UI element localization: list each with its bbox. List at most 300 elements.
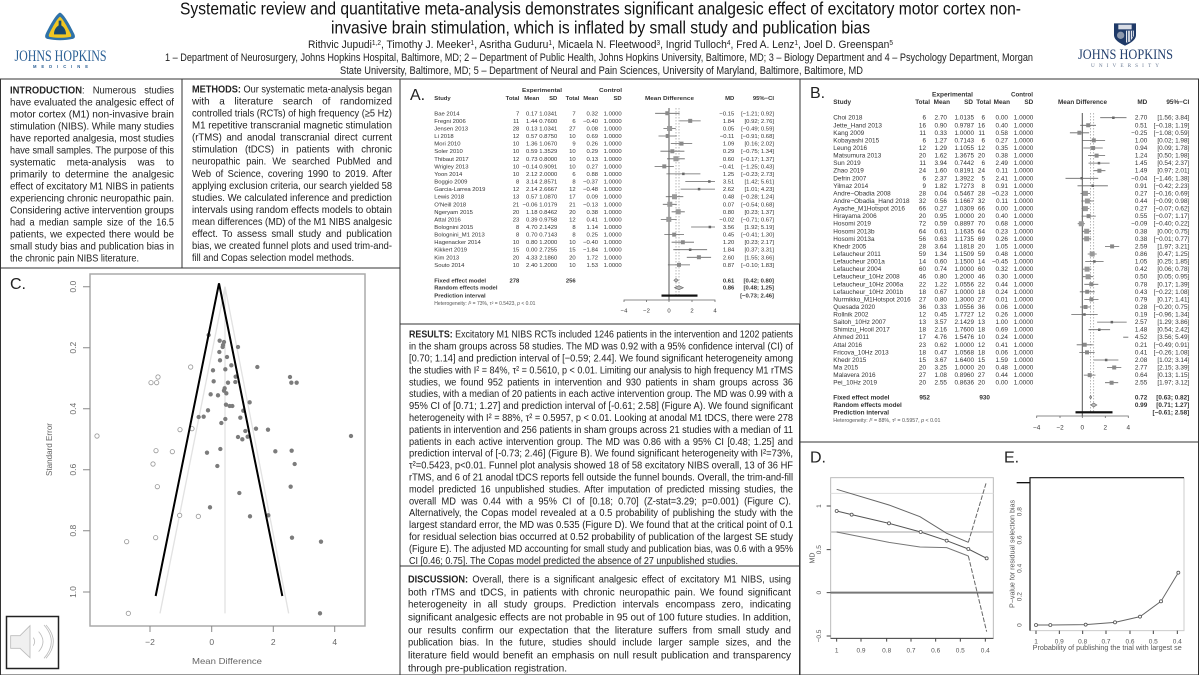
- table B values: [−0.16; 0.69]: [1154, 190, 1190, 197]
- table B summary rows: Fixed effect model: [833, 394, 890, 401]
- table A values: 0.32: [587, 111, 598, 117]
- panel: introduction: INTRODUCTION: Numerous studies: [10, 86, 174, 96]
- table B values: 59: [978, 251, 985, 258]
- table B values: 1.0000: [1014, 213, 1034, 220]
- table A values: 4.70: [526, 225, 538, 231]
- table A values: 0.05: [723, 126, 735, 132]
- table B values: 1.59: [996, 357, 1008, 364]
- table B values: 0.91: [1135, 183, 1148, 190]
- panel: introduction: have reported analgesia, most studies: [10, 134, 174, 144]
- funnel plot frame and axes: 1.0: [68, 586, 78, 598]
- table A values: 2.8571: [539, 180, 557, 186]
- table B values: [1.56; 3.84]: [1157, 115, 1190, 122]
- table A values: 12: [513, 134, 519, 140]
- table B values: [−0.07; 1.17]: [1154, 213, 1190, 220]
- table A study names: Bae 2014: [434, 111, 460, 117]
- table B study names: Saitoh_10Hz 2007: [833, 319, 886, 326]
- table A values: [−1.21; 0.92]: [741, 111, 774, 117]
- table B values: 18: [978, 327, 985, 334]
- table B values: 12: [919, 145, 926, 152]
- table B values: 1.0000: [954, 130, 974, 137]
- table B values: 0.41: [996, 342, 1008, 349]
- table B values: 1.0000: [1014, 236, 1034, 243]
- table A values: 2.0000: [539, 172, 558, 178]
- table A values: 0.59: [526, 149, 538, 155]
- table B header: Experimental: [932, 92, 973, 99]
- funnel plot frame and axes: −2: [145, 637, 155, 647]
- table A values: 10: [513, 263, 520, 269]
- table A study names: O'Neill 2018: [434, 202, 467, 208]
- table A values: 1.0000: [604, 210, 622, 216]
- table A values: [0.23; 2.17]: [745, 240, 774, 246]
- table B header: SD: [1024, 99, 1034, 106]
- table B values: 69: [978, 236, 985, 243]
- table A header: 95%−CI: [753, 96, 774, 102]
- table B header: [833, 92, 1190, 106]
- table B header: Mean: [934, 99, 950, 106]
- table A values: 12: [569, 217, 576, 223]
- panel: results: 95% CI of [0.71; 1.27] and prediction interval of [-0.61; 2.58] (Figure A). We found significant: [409, 401, 793, 412]
- table A values: 2.40: [526, 263, 538, 269]
- table B values: 1.0000: [1014, 221, 1034, 228]
- forest plot A axis labels: −4: [621, 309, 628, 315]
- table A values: 20: [569, 255, 576, 261]
- table B values: 1.1735: [954, 236, 974, 243]
- table A values: 13: [513, 195, 520, 201]
- table A values: [1.01; 4.23]: [745, 187, 774, 193]
- table B values: 20: [978, 380, 985, 387]
- panel: methods: effect. To assess small study and publication: [192, 229, 392, 240]
- table A values: 2.60: [723, 255, 735, 261]
- table A values: 10: [513, 240, 520, 246]
- title: invasive brain stimulation, which is inflated by small study and publication bias: [331, 18, 870, 38]
- table B values: [0.02; 1.98]: [1157, 137, 1190, 144]
- table B values: 0.00: [996, 380, 1008, 387]
- table B values: 15: [919, 357, 926, 364]
- table B values: 1.7600: [954, 327, 974, 334]
- table B values: 36: [919, 304, 926, 311]
- table A header: Mean Difference: [645, 96, 695, 102]
- table B values: 1.0000: [1014, 168, 1034, 175]
- table A values: [−0.75; 1.34]: [741, 149, 774, 155]
- table A values: [1.92; 5.19]: [745, 225, 774, 231]
- table A values: [−0.23; 2.73]: [741, 172, 774, 178]
- table B values: 18: [919, 327, 926, 334]
- logo: Johns Hopkins Medicine: [14, 13, 106, 69]
- table A values: 10: [513, 172, 520, 178]
- table A values: 0.73: [526, 157, 538, 163]
- table B study names: Malavera 2016: [833, 372, 876, 379]
- table B values: 1.0000: [954, 213, 974, 220]
- table B values: 6: [922, 137, 926, 144]
- authors: 1,2: [372, 40, 381, 47]
- table B values: 1.0000: [1014, 342, 1034, 349]
- panel: methods: intervals using random effects models to obtain: [192, 205, 392, 216]
- table B study names: Attal 2016: [833, 342, 863, 349]
- table B values: 1.0000: [1014, 274, 1034, 281]
- table B values: 0.06: [996, 304, 1008, 311]
- table B values: 0.00: [996, 115, 1008, 122]
- panel: methods: stimulation (tDCS) in patients with chronic: [192, 145, 392, 156]
- panel: results: [0.70; 1.14] and prediction interval of [−0.59; 2.44]. We found significant heterogeneity among: [409, 354, 793, 364]
- table B study names: Choi 2018: [833, 115, 863, 122]
- table B values: 11: [978, 130, 985, 137]
- table A values: 1.53: [587, 263, 599, 269]
- table A values: −0.13: [583, 202, 599, 208]
- table B values: 0.91: [996, 183, 1008, 190]
- table A values: 1.0000: [604, 180, 622, 186]
- table A values: 0.13: [526, 126, 538, 132]
- table B values: 2.37: [935, 175, 947, 182]
- table B values: 0.59: [935, 221, 947, 228]
- panel: funnel plot C: [0, 268, 400, 675]
- table B values: 4.52: [1135, 334, 1148, 341]
- table B values: 20: [919, 364, 926, 372]
- table B values: 0.8636: [954, 380, 974, 387]
- forest plot B axis labels: 2: [1104, 424, 1108, 432]
- table B values: [0.97; 2.01]: [1157, 168, 1190, 175]
- table B values: 8: [981, 183, 985, 190]
- table B values: 0.8191: [954, 168, 974, 175]
- table B values: [−1.08; 0.59]: [1154, 130, 1190, 137]
- funnel plot frame and axes: [44, 274, 365, 666]
- table B values: 0.5467: [954, 190, 974, 197]
- table A values: [0.92; 2.76]: [745, 119, 774, 125]
- table A values: [−0.17; 1.37]: [741, 157, 774, 163]
- panel: results: heterogeneity with I² = 88%, τ² = 0.5957, p < 0.01. Looking at anodal M1 tDCS, there were 278: [409, 413, 793, 424]
- table A summary rows: Prediction interval: [434, 294, 486, 300]
- table B values: 18: [978, 349, 985, 356]
- funnel plot frame and axes: 0.8: [68, 525, 78, 537]
- table A values: 2.1860: [539, 255, 558, 261]
- table A values: 10: [569, 134, 576, 140]
- table A values: 0.8462: [539, 210, 557, 216]
- table B values: 1.0000: [1014, 130, 1034, 137]
- affiliations: 1 – Department of Neurosurgery, Johns Hopkins Hospital, Baltimore, MD; 2 – Department of Public Health, Johns Hopkins University, Baltimore, MD; 3 – Biology Department and 4 – Psychology Department, Morgan: [165, 52, 1033, 64]
- table A values: 1.0000: [604, 172, 622, 178]
- table A values: 1.20: [723, 240, 735, 246]
- table A values: 0.69: [587, 134, 598, 140]
- table B study names: Hosomi 2013b: [833, 228, 875, 235]
- table B values: −0.25: [1131, 130, 1148, 137]
- table B values: 0.78: [1135, 281, 1148, 288]
- table A values: 0.29: [723, 149, 734, 155]
- table B values: [2.15; 3.39]: [1157, 364, 1190, 372]
- table B values: [−0.01; 0.77]: [1154, 236, 1190, 243]
- table A values: 12: [513, 187, 519, 193]
- table A values: 1.0870: [539, 195, 558, 201]
- chart D: MD vs publication probability: [810, 478, 993, 654]
- table B study names: Lefaucheur_10Hz 2006a: [833, 281, 904, 288]
- table B study names: Fricova_10Hz 2013: [833, 349, 889, 356]
- table A values: −1.84: [583, 248, 599, 254]
- chart E: p-value for residual selection bias: 0.2: [1016, 592, 1024, 601]
- table A study names: Lewis 2018: [434, 195, 465, 201]
- panel: discussion: both rTMS and tDCS, in patients with chronic neuropathic pain. We found significant: [408, 588, 791, 598]
- table B study names: Ma 2015: [833, 364, 859, 372]
- table B values: 0.38: [1135, 228, 1148, 235]
- table A values: 10: [569, 164, 576, 170]
- table B study names: Khedr 2005: [833, 243, 867, 250]
- table A values: 2.62: [723, 187, 734, 193]
- table B values: 0.38: [996, 153, 1008, 160]
- table B values: 0.95: [935, 213, 947, 220]
- table B values: 18: [919, 289, 926, 296]
- table A values: 0.41: [587, 217, 598, 223]
- table B values: 1.3675: [954, 153, 974, 160]
- panel: results: model predicted 16 unpublished studies. After imputation of predicted missing studies, the: [409, 484, 793, 495]
- forest plot A axis labels: −2: [643, 309, 650, 315]
- table B values: 17: [919, 334, 926, 341]
- table A values: 7: [516, 111, 519, 117]
- table B values: 20: [919, 213, 926, 220]
- title: [180, 0, 1021, 38]
- funnel plot frame and axes: 4: [332, 637, 337, 647]
- table A values: 0.27: [587, 164, 598, 170]
- table B values: 0.11: [996, 168, 1008, 175]
- table B values: 22: [978, 281, 985, 288]
- table B study names: Lefaucheur_10Hz 2008: [833, 274, 900, 281]
- table B values: 0.33: [935, 130, 947, 137]
- chart E: p-value for residual selection bias: Probability of publishing the trial with largest se: [1033, 645, 1182, 652]
- table B header: 95%−CI: [1166, 99, 1190, 106]
- panel: results: studies, with a median of 20 patients in each active intervention group. The MD was 0.99 with a: [409, 389, 793, 400]
- forest plot A axis labels: 0: [667, 309, 671, 315]
- table B summary rows: Random effects model: [833, 402, 902, 409]
- table B values: 32: [978, 198, 985, 205]
- table A values: [−0.28; 1.24]: [741, 195, 774, 201]
- table B values: 1.0000: [1014, 206, 1034, 213]
- table A values: [−1.25; 0.43]: [741, 164, 774, 170]
- table B study names: Andre−Obadia_Hand 2018: [833, 198, 910, 205]
- table A header: Total: [566, 96, 580, 102]
- funnel plot frame and axes: 0.6: [68, 464, 78, 476]
- table B values: 24: [978, 168, 985, 175]
- table A values: 1.0179: [539, 202, 557, 208]
- table B values: 1.82: [935, 183, 947, 190]
- table B values: [0.50; 1.98]: [1157, 153, 1190, 160]
- table B values: 11: [919, 160, 926, 167]
- table B values: 1.1509: [954, 251, 974, 258]
- forest plot A axis labels: 2: [690, 309, 694, 315]
- forest plot B graphic: [1037, 113, 1128, 418]
- chart D: MD vs publication probability: 0.6: [931, 647, 941, 654]
- table B values: 0.60: [935, 258, 947, 266]
- table B values: 18: [978, 289, 985, 296]
- table B values: 0.11: [996, 198, 1008, 205]
- table B values: 60: [978, 266, 985, 273]
- panel label B: B.: [810, 85, 825, 102]
- panel: discussion: [400, 566, 800, 675]
- authors: 4: [727, 40, 731, 47]
- chart E: p-value for residual selection bias: 0.8: [1078, 638, 1088, 645]
- table B values: [−0.26; 1.08]: [1154, 349, 1190, 356]
- table B study names: Lefaucheur 2001a: [833, 258, 885, 266]
- table B values: 1.0000: [1014, 364, 1034, 372]
- chart D: MD vs publication probability: 0.5: [816, 545, 823, 554]
- table B values: 1.0309: [954, 206, 974, 213]
- table A values: 0.39: [526, 217, 538, 223]
- table B values: 9: [922, 183, 926, 190]
- panel: methods: neuropathic pain. We searched PubMed and: [192, 157, 392, 168]
- forest plot B axis labels: −2: [1056, 424, 1064, 432]
- table B values: 2.59: [1135, 243, 1148, 250]
- panel: discussion: literature field would benefit an emphasis on null result publication and transparency: [408, 650, 792, 662]
- authors: , Asritha Guduru: [474, 39, 548, 51]
- chart D: MD vs publication probability: 0.4: [981, 647, 990, 654]
- panel label D: D.: [810, 450, 826, 466]
- table B study names: Hirayama 2006: [833, 213, 877, 220]
- table A values: 1.0000: [604, 119, 622, 125]
- funnel plot frame and axes: 0: [209, 637, 214, 647]
- table B values: 2.55: [1135, 380, 1148, 387]
- table B values: 0.41: [1135, 349, 1148, 356]
- table A values: 8: [572, 180, 576, 186]
- table B values: 13: [978, 319, 985, 326]
- table A summary rows: 0.61: [723, 278, 735, 284]
- table B values: 1.0000: [1014, 319, 1034, 326]
- table B values: [0.00; 0.75]: [1157, 228, 1190, 235]
- table A values: −0.48: [583, 187, 599, 193]
- panel: results: CI [0.46; 0.75]. The Copas model predicted the absence of 27 unpublished studies.: [409, 556, 738, 567]
- table B values: 0.67: [935, 289, 947, 296]
- table A values: 1.0000: [604, 225, 622, 231]
- table A study names: Kikkert 2019: [434, 248, 467, 254]
- table A header: Total: [506, 96, 520, 102]
- panel: methods: METHODS: Our systematic meta-analysis began: [192, 84, 392, 96]
- table A study names: Attal 2016: [434, 217, 462, 223]
- table B study names: Leung 2016: [833, 145, 868, 152]
- table A header: SD: [614, 96, 622, 102]
- panel: results: rTMS, and 6 of 21 anodal tDCS reports fell outside the funnel bounds. Overall, the trim-and-fill: [409, 472, 793, 484]
- table B values: [0.17; 1.39]: [1157, 281, 1190, 288]
- table A values: 7: [572, 111, 576, 117]
- table B values: 0.68: [996, 221, 1008, 228]
- table B summary rows: [−0.61; 2.58]: [1153, 409, 1189, 416]
- table A header: Control: [599, 88, 622, 94]
- table A header: Mean: [583, 96, 599, 102]
- table B values: 13: [919, 319, 926, 326]
- table B summary rows: 0.72: [1135, 394, 1148, 401]
- table B values: 27: [978, 296, 985, 303]
- table B study names: Jette_Hand 2013: [833, 122, 882, 129]
- table B values: 1.1500: [954, 258, 974, 266]
- table B study names: Kang 2009: [833, 130, 865, 137]
- table B values: 66: [919, 206, 926, 213]
- table B values: 18: [919, 349, 926, 356]
- table B values: [−1.46; 1.38]: [1154, 175, 1190, 182]
- panel: discussion: DISCUSSION: Overall, there is a significant analgesic effect of excitatory M1 NIBS, using: [408, 574, 791, 586]
- table A values: 1.0000: [604, 157, 622, 163]
- table B values: 2.70: [935, 115, 947, 122]
- panel: forest plot B: [800, 79, 1198, 442]
- table B values: 0.9787: [954, 122, 974, 129]
- panel: methods: Web of Science, covering 1990 to 2019. After: [192, 169, 393, 180]
- table A values: 20: [513, 210, 520, 216]
- table B values: 0.40: [996, 213, 1008, 220]
- panel: introduction: Considering active intervention groups: [10, 206, 174, 216]
- authors: , Joel D. Greenspan: [798, 39, 889, 51]
- table B values: 0.27: [1135, 190, 1148, 197]
- table B values: 5: [981, 175, 985, 182]
- table A values: 0.57: [526, 134, 538, 140]
- table A values: 0.57: [526, 195, 538, 201]
- table B values: 0.43: [1135, 289, 1148, 296]
- panel: introduction: have small samples. The purpose of this: [10, 146, 174, 156]
- table B values: 1.0000: [1014, 153, 1034, 160]
- table A values: 21: [569, 202, 576, 208]
- table A summary rows: 278: [509, 278, 520, 284]
- table A values: 1.14: [587, 225, 599, 231]
- table B values: 12: [978, 312, 985, 318]
- panel: discussion: publication bias. In the future, studies should include larger sample sizes, and the: [408, 638, 791, 648]
- table B values: 2.41: [996, 175, 1008, 182]
- table B values: 1.3000: [954, 296, 974, 303]
- table A values: 10: [569, 263, 576, 269]
- table A study names: Souto 2014: [434, 263, 465, 269]
- panel: discussion: through pre-publication registration.: [408, 664, 567, 674]
- chart E: p-value for residual selection bias: 0.4: [1173, 638, 1182, 645]
- table B values: 20: [919, 380, 926, 387]
- chart E: p-value for residual selection bias: P−value for residual selection bias: [1010, 499, 1016, 608]
- table B values: 1.0000: [1014, 258, 1034, 266]
- funnel plot frame and axes: Standard Error: [44, 423, 54, 476]
- table A values: 27: [569, 126, 576, 132]
- table A values: 0.13: [587, 157, 599, 163]
- table B values: [−0.18; 1.19]: [1154, 122, 1190, 129]
- table B values: 27: [919, 296, 926, 303]
- table A study names: Ngeryam 2015: [434, 210, 474, 216]
- table B values: 66: [978, 206, 985, 213]
- table B values: 1.08: [935, 372, 947, 379]
- table B values: −0.23: [992, 190, 1008, 197]
- table B values: 3.64: [935, 243, 947, 250]
- table B values: 1.7273: [954, 183, 974, 190]
- funnel plot frame and axes: 0.2: [68, 342, 78, 354]
- affiliations: State University, Baltimore, MD; 5 – Department of Neural and Pain Sciences, University of Maryland, Baltimore, Baltimore, MD: [340, 65, 863, 77]
- chart D: MD vs publication probability: 1: [816, 504, 823, 508]
- table B values: 1.0000: [1014, 334, 1034, 341]
- panel: methods: controlled trials (RCTs) of high frequency (≥5 Hz): [192, 108, 392, 120]
- panel: introduction: motor cortex (M1) non-invasive brain: [10, 110, 174, 120]
- table A values: [−0.10; 1.83]: [741, 263, 774, 269]
- panel: results: largest standard error, the MD was 0.535 (Figure D). We found that at the critical point of 0.1: [409, 520, 793, 531]
- table B values: 6: [981, 137, 985, 144]
- table B values: [919, 115, 1190, 387]
- table A values: 2.14: [526, 187, 538, 193]
- table B values: 2.77: [1135, 364, 1148, 372]
- table B values: 0.8960: [954, 372, 974, 379]
- table B values: 1.0000: [1014, 281, 1034, 288]
- table B values: 6: [981, 160, 985, 167]
- table B values: 0.27: [1135, 206, 1148, 213]
- table B values: 1.6400: [954, 357, 974, 364]
- table B values: −0.45: [992, 258, 1008, 266]
- funnel plot frame and axes: 0.4: [68, 403, 78, 415]
- table A header: Study: [434, 96, 451, 102]
- table B study names: Defrin 2007: [833, 175, 867, 182]
- panel: results: RESULTS: Excitatory M1 NIBS RCTs included 1246 patients in the intervention and 1202 patients: [409, 330, 793, 341]
- table A summary rows: 0.86: [723, 286, 735, 292]
- table A study names: Kim 2013: [434, 255, 460, 261]
- table B values: 1.0000: [1014, 304, 1034, 311]
- table B values: 1.0000: [1014, 145, 1034, 152]
- table A values: 1.44: [526, 119, 538, 125]
- forest plot A axis labels: 4: [713, 309, 717, 315]
- panel: introduction: small study bias and publication bias in: [10, 242, 174, 252]
- table A values: 0.80: [723, 210, 735, 216]
- table B study names: Hosomi 2019: [833, 221, 871, 228]
